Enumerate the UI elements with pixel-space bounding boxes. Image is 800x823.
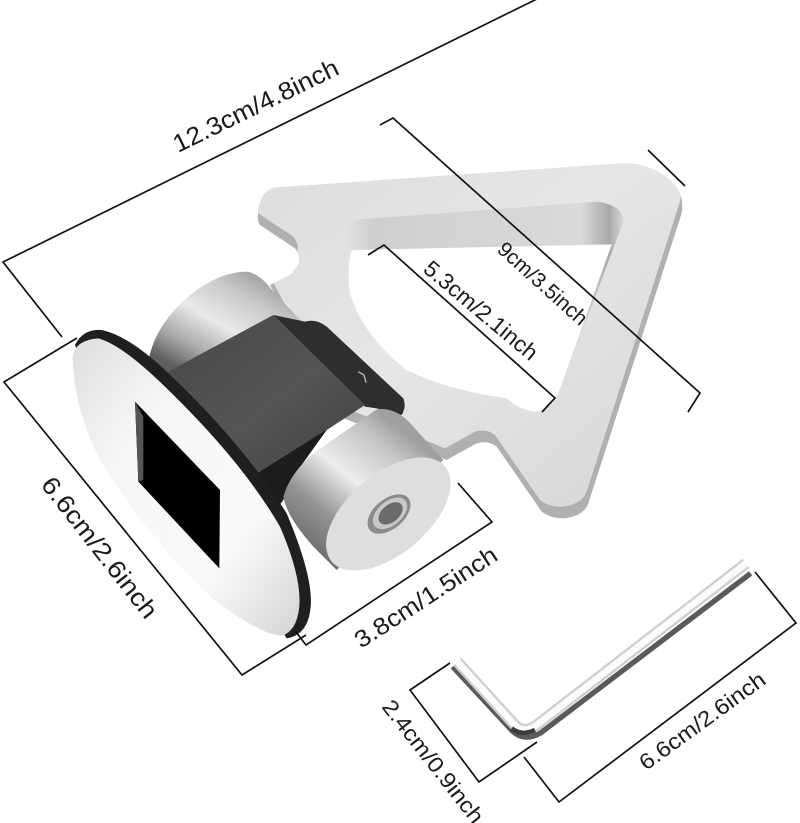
label: overall length: 12.3cm/4.8inch	[168, 54, 343, 158]
triangular tow hook	[256, 152, 682, 518]
oval plate	[73, 338, 300, 636]
body depth line	[296, 483, 492, 645]
long key arm line	[524, 572, 796, 802]
lower cylinder	[283, 409, 443, 570]
label: plate height: 6.6cm/2.6inch	[35, 471, 163, 624]
label: window width: 5.3cm/2.1inch	[419, 256, 543, 365]
label: short key arm: 2.4cm/0.9inch	[377, 695, 489, 823]
under block shadow	[257, 405, 365, 513]
oval plate rim	[75, 330, 311, 638]
upper cylinder	[149, 272, 305, 377]
label: body depth: 3.8cm/1.5inch	[350, 542, 503, 654]
hex key	[453, 563, 751, 737]
mounting bracket and cylinders	[73, 272, 471, 638]
window width line	[368, 245, 555, 412]
bracket side	[273, 315, 405, 415]
black block	[165, 315, 365, 473]
label: long key arm: 6.6cm/2.6inch	[634, 667, 770, 775]
plate height line	[4, 338, 306, 675]
label: hook height: 9cm/3.5inch	[493, 238, 592, 330]
hex bolt	[360, 486, 418, 542]
short key arm line	[410, 663, 537, 782]
screw detail	[358, 372, 366, 383]
square opening	[135, 402, 220, 568]
overall length line	[3, 0, 685, 337]
hook height line	[380, 118, 700, 412]
cylinder end face	[306, 436, 471, 592]
